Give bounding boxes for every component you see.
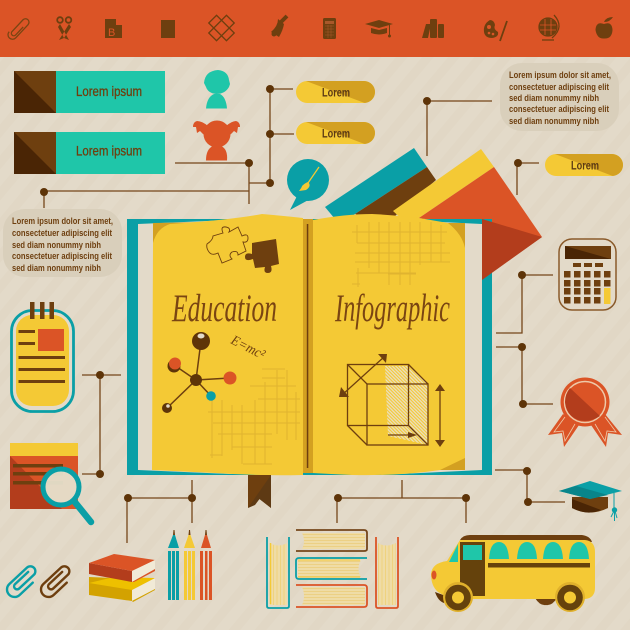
open book	[127, 214, 542, 475]
horizontal teal book	[296, 558, 367, 579]
text bubble right	[500, 63, 619, 131]
formula: E=mc²	[227, 333, 268, 363]
icon: pencils	[168, 530, 212, 600]
book page edges	[138, 220, 303, 474]
pill label 2	[296, 122, 375, 144]
icon: apple	[596, 17, 613, 39]
book cover	[127, 219, 492, 475]
standing teal book	[267, 537, 289, 608]
icon: bell	[271, 16, 287, 37]
banner 1	[14, 71, 165, 113]
bookmark	[248, 475, 271, 508]
molecule diagram	[162, 332, 236, 413]
icon: puzzle pieces	[207, 227, 279, 273]
grid texture right	[352, 222, 450, 287]
header band with icons	[0, 0, 630, 57]
horizontal brown book	[296, 530, 367, 551]
pill label 3	[545, 154, 623, 176]
pill label 2: Lorem	[322, 126, 350, 140]
text bubble left: sed diam nonummy nibh	[12, 240, 101, 251]
icon: calculator	[323, 18, 336, 39]
icon: graduation cap	[365, 20, 393, 38]
text bubble left: consectetuer adipiscing elit	[12, 228, 113, 239]
icon: globe	[539, 15, 559, 40]
icon: notebook	[161, 20, 175, 38]
title: Infographic: Infographic	[334, 287, 450, 330]
icon: calculator	[559, 239, 616, 310]
icon: paper clips	[4, 564, 75, 600]
right page	[313, 214, 465, 475]
icon: notepad	[12, 302, 74, 412]
grid texture left	[208, 369, 300, 464]
text bubble right: sed diam nonummy nibh	[509, 93, 599, 104]
icon: award ribbon	[548, 378, 622, 447]
icon: folder with magnifier	[10, 443, 91, 522]
icon: document	[105, 19, 122, 39]
pill label 3: Lorem	[571, 158, 599, 172]
icon: girl silhouette	[193, 120, 240, 160]
standing orange book	[376, 537, 398, 608]
horizontal orange book	[296, 585, 367, 607]
text bubble left: sed diam nonummy nibh	[12, 263, 101, 274]
book spine	[303, 219, 313, 473]
icon: scissors	[57, 17, 71, 40]
icon: crossed rulers	[209, 15, 234, 41]
text bubble left: consectetuer adipiscing elit	[12, 251, 113, 262]
tilted folders behind book	[325, 148, 542, 280]
icon: graduation cap	[559, 481, 622, 521]
icon: boy silhouette	[204, 70, 230, 108]
cube diagram	[339, 354, 445, 447]
banner 1: Lorem ipsum	[76, 83, 142, 99]
pill label 1: Lorem	[322, 86, 350, 100]
icon: books	[422, 19, 444, 38]
banner 2: Lorem ipsum	[76, 142, 142, 158]
icon: palette and brush	[484, 20, 507, 41]
icon: speech bubble with brush	[287, 159, 329, 210]
pill label 1	[296, 81, 375, 103]
icon: row of books	[267, 530, 398, 608]
icon: paper clip	[6, 16, 30, 41]
icon: stacked books	[89, 554, 155, 602]
connector lines	[44, 89, 565, 543]
connector dots	[40, 85, 532, 506]
left page	[152, 214, 303, 475]
icon: document: B	[108, 27, 115, 39]
banner 2	[14, 132, 165, 174]
text bubble right: sed diam nonummy nibh	[509, 116, 599, 127]
title: Education: Education	[171, 287, 277, 330]
text bubble left: Lorem ipsum dolor sit amet,	[12, 216, 113, 227]
text bubble left	[3, 209, 122, 277]
icon: school bus	[431, 535, 595, 612]
